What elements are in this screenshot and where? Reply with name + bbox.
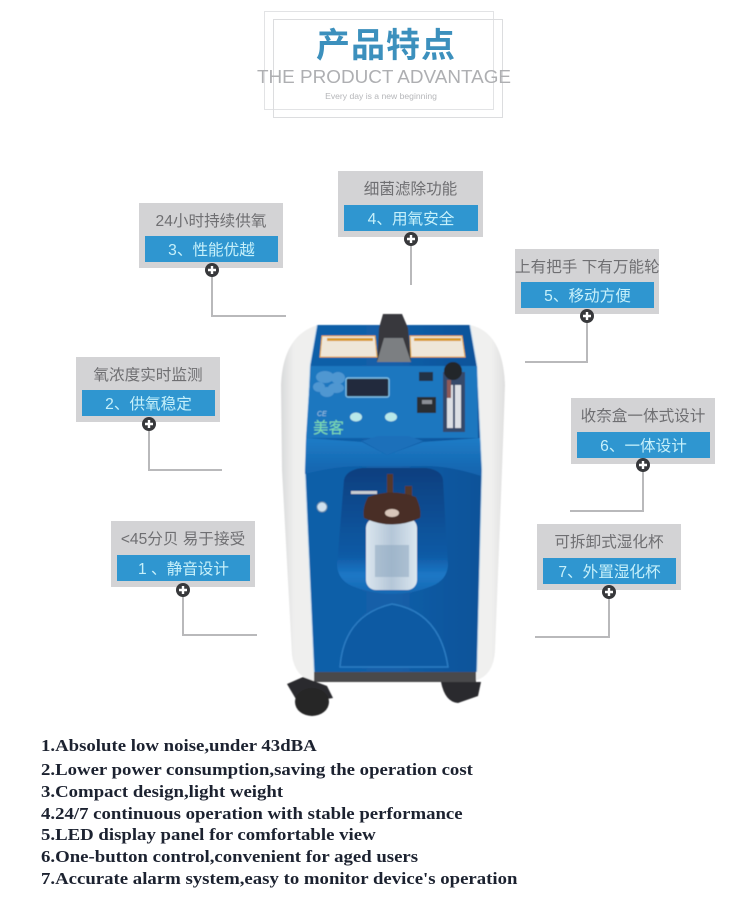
callout 2: stable supply: 2、供氧稳定 xyxy=(105,396,192,413)
callout 6: integrated design: 6、一体设计 xyxy=(600,438,687,455)
callout 6: integrated design xyxy=(571,398,715,464)
callout 7: external humidifier cup: 可拆卸式湿化杯 xyxy=(554,534,664,551)
notch on overhang xyxy=(362,436,423,455)
feature 1: 1.Absolute low noise,under 43dBA xyxy=(41,736,317,755)
feature 5: 5.LED display panel for comfortable view xyxy=(41,825,376,844)
heading: Chinese title: 产品特点 xyxy=(316,27,456,65)
callout 1: quiet design: 1 、静音设计 xyxy=(138,561,229,578)
CE mark and brand: 美客 xyxy=(313,419,344,437)
handle xyxy=(377,314,411,362)
lower arched door xyxy=(340,604,448,667)
callout 3: performance xyxy=(139,203,283,268)
callout 5: easy to move xyxy=(515,249,659,314)
callout 1: quiet design: <45分贝 易于接受 xyxy=(121,531,245,548)
callout 2: stable supply xyxy=(76,357,220,422)
callout 4: safe oxygen: 细菌滤除功能 xyxy=(364,181,457,198)
callout 7: external humidifier cup xyxy=(537,524,681,590)
LED display xyxy=(346,378,389,397)
blue front panel xyxy=(305,325,482,672)
CE mark and brand: CE xyxy=(317,411,327,418)
heading: product advantage xyxy=(257,11,511,118)
feature 6: 6.One-button control,convenient for aged users xyxy=(41,847,418,866)
callout 3: performance: 24小时持续供氧 xyxy=(156,213,266,230)
flower pattern xyxy=(313,371,345,397)
marker 3 xyxy=(205,263,219,277)
callout 5: easy to move: 上有把手 下有万能轮 xyxy=(515,259,660,276)
power and alarm buttons xyxy=(417,372,436,413)
light edge of the panel xyxy=(305,325,482,672)
feature list xyxy=(41,736,518,888)
CE mark and brand xyxy=(313,411,344,437)
callout 3: performance: 3、性能优越 xyxy=(168,242,255,259)
heading frames xyxy=(264,11,503,118)
indicator lights xyxy=(350,412,397,422)
flowmeter xyxy=(443,362,465,432)
marker 2 xyxy=(142,417,156,431)
top control panel xyxy=(306,366,478,438)
callout 1: quiet design xyxy=(111,521,255,587)
feature 7: 7.Accurate alarm system,easy to monitor device's operation xyxy=(41,869,517,888)
callout 6: integrated design: 收奈盒一体式设计 xyxy=(581,408,705,425)
marker 1 xyxy=(176,583,190,597)
humidifier bottle xyxy=(351,474,420,590)
illustration: oxygen concentrator xyxy=(280,313,506,717)
feature 3: 3.Compact design,light weight xyxy=(41,782,283,801)
marker 6 xyxy=(636,458,650,472)
feature 2: 2.Lower power consumption,saving the operation cost xyxy=(41,760,473,779)
base strip xyxy=(314,672,476,682)
casters xyxy=(287,677,481,716)
callout 7: external humidifier cup: 7、外置湿化杯 xyxy=(558,564,661,581)
bottle recess xyxy=(337,468,448,594)
white side shell xyxy=(281,325,505,681)
door lock xyxy=(317,502,327,512)
callout 4: safe oxygen xyxy=(338,171,483,237)
feature 4: 4.24/7 continuous operation with stable performance xyxy=(41,804,463,823)
heading: English subtitle: THE PRODUCT ADVANTAGE xyxy=(257,67,511,88)
marker 7 xyxy=(602,585,616,599)
callout 2: stable supply: 氧浓度实时监测 xyxy=(93,367,203,384)
marker 4 xyxy=(404,232,418,246)
blue overhang xyxy=(305,438,481,476)
marker 5 xyxy=(580,309,594,323)
callout 5: easy to move: 5、移动方便 xyxy=(544,288,631,305)
callout 4: safe oxygen: 4、用氧安全 xyxy=(368,211,454,228)
heading: tagline: Every day is a new beginning xyxy=(325,91,437,101)
warning labels xyxy=(320,336,465,357)
